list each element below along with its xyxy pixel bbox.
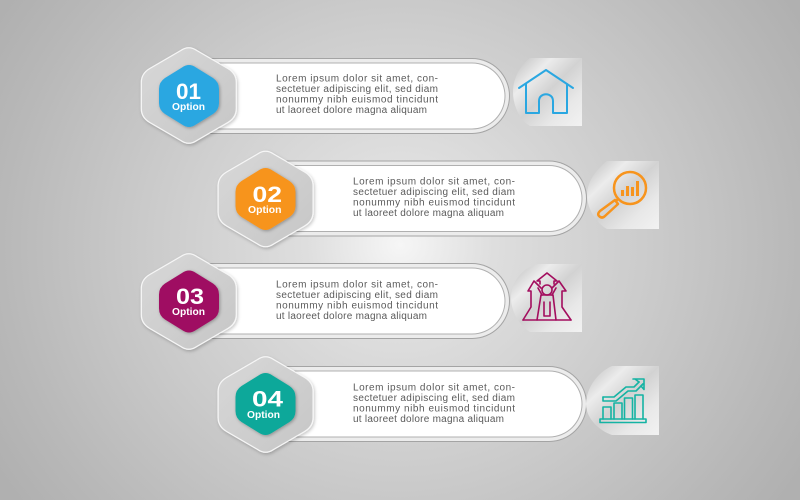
hexagon badge: 02 [252,182,282,207]
text block [276,74,438,116]
text block: ut laoreet dolore magna aliquam [276,311,427,322]
pill card [200,58,510,134]
hexagon badge [218,151,313,247]
hexagon badge: 01 [176,79,201,104]
icon: house [513,58,582,126]
text block: sectetuer adipiscing elit, sed diam [353,187,515,198]
icon: person with three arrows [511,264,582,332]
icon: growth bar chart [586,366,659,435]
text block: Lorem ipsum dolor sit amet, con- [276,74,438,85]
pill card [200,263,510,339]
text block [276,280,438,322]
text block: sectetuer adipiscing elit, sed diam [276,290,438,301]
text block: nonummy nibh euismod tincidunt [276,301,438,312]
hexagon badge: Option [248,205,282,216]
text block: sectetuer adipiscing elit, sed diam [276,84,438,95]
pill card [277,366,587,442]
text block: nonummy nibh euismod tincidunt [276,95,438,106]
panel: option 02 [218,151,659,247]
text block: nonummy nibh euismod tincidunt [353,198,515,209]
text block: Lorem ipsum dolor sit amet, con- [276,280,438,291]
hexagon badge [141,48,236,143]
text block [353,383,515,425]
hexagon badge: Option [247,410,280,421]
panel: option 04 [218,357,659,452]
text block: nonummy nibh euismod tincidunt [353,404,515,415]
text block: ut laoreet dolore magna aliquam [353,208,504,219]
hexagon badge: 03 [176,284,204,309]
panel: option 03 [141,254,582,349]
text block: ut laoreet dolore magna aliquam [276,105,427,116]
text block: Lorem ipsum dolor sit amet, con- [353,383,515,394]
panel: option 01 [141,48,582,143]
text block: sectetuer adipiscing elit, sed diam [353,393,515,404]
text block: ut laoreet dolore magna aliquam [353,414,504,425]
pill card [277,160,587,236]
hexagon badge [218,357,313,452]
text block: Lorem ipsum dolor sit amet, con- [353,177,515,188]
hexagon badge: Option [172,102,205,113]
hexagon badge: Option [172,307,205,318]
hexagon badge [141,254,236,349]
icon: magnifier with bars [587,161,659,229]
hexagon badge: 04 [252,386,284,412]
text block [353,177,515,219]
